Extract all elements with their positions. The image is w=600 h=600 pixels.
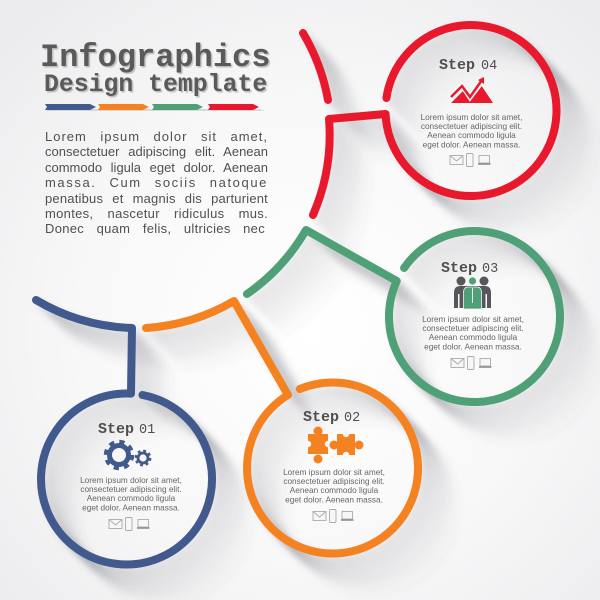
step 04 heading: 04	[481, 59, 497, 74]
title: Infographics	[40, 39, 270, 76]
step 03 heading: Step	[441, 260, 477, 277]
icon: gears	[106, 442, 150, 468]
step 02 heading: 02	[344, 411, 360, 426]
subtitle: Design template	[44, 71, 267, 99]
step 03 text: Lorem ipsum dolor sit amet,	[422, 315, 524, 324]
panel: step 01	[80, 421, 182, 530]
step 04 text: Lorem ipsum dolor sit amet,	[421, 113, 522, 122]
step 01 text: Lorem ipsum dolor sit amet,	[80, 476, 182, 485]
paragraph: consectetuer adipiscing elit. Aenean	[45, 144, 268, 159]
icon: team of people	[454, 276, 491, 309]
paragraph: montes, nascetur ridiculus mus.	[45, 206, 268, 221]
step 01 blue line	[36, 300, 212, 565]
step 01 heading: Step	[98, 421, 134, 438]
panel: step 04	[421, 57, 522, 166]
step 03 text: eget dolor. Aenean massa.	[424, 342, 522, 352]
step 04 red line	[303, 25, 556, 215]
colored arrows under title	[45, 104, 265, 111]
step 02 text: Aenean commodo ligula	[290, 486, 379, 495]
step 04 text: Aenean commodo ligula	[427, 131, 516, 140]
icons: mail phone laptop	[450, 154, 490, 166]
step 01 heading: 01	[139, 423, 155, 438]
paragraph	[45, 129, 268, 236]
paragraph: Lorem ipsum dolor sit amet,	[45, 129, 268, 144]
step 02 orange line	[146, 301, 418, 553]
step 02 text: consectetuer adipiscing elit.	[283, 477, 385, 486]
step 02 text: eget dolor. Aenean massa.	[285, 496, 383, 504]
step 03 green line	[247, 230, 560, 402]
step 03 heading: 03	[482, 262, 498, 277]
paragraph: commodo ligula eget dolor. Aenean	[45, 160, 268, 175]
step 02 heading: Step	[303, 409, 339, 426]
step 01 text: consectetuer adipiscing elit.	[80, 485, 182, 494]
panel: step 03	[422, 260, 524, 370]
icon: rising chart over mountain	[449, 77, 493, 103]
icons: mail phone laptop	[109, 518, 150, 530]
icons: mail phone laptop	[451, 356, 492, 370]
paragraph: Donec quam felis, ultricies nec	[45, 221, 265, 236]
icons: mail phone laptop	[313, 510, 354, 522]
step 03 text: consectetuer adipiscing elit.	[422, 324, 524, 333]
panel: step 02	[283, 409, 385, 522]
step 01 text: Aenean commodo ligula	[87, 494, 176, 503]
paragraph: penatibus et magnis dis parturient	[45, 191, 268, 206]
step 03 text: Aenean commodo ligula	[429, 333, 518, 342]
icon: puzzle pieces	[305, 426, 364, 464]
paragraph: massa. Cum sociis natoque	[45, 175, 268, 190]
step 04 heading: Step	[439, 57, 475, 74]
step 04 text: consectetuer adipiscing elit.	[421, 122, 522, 131]
step 02 text: Lorem ipsum dolor sit amet,	[283, 468, 385, 477]
step 01 text: eget dolor. Aenean massa.	[82, 504, 180, 512]
step 04 text: eget dolor. Aenean massa.	[423, 140, 520, 150]
